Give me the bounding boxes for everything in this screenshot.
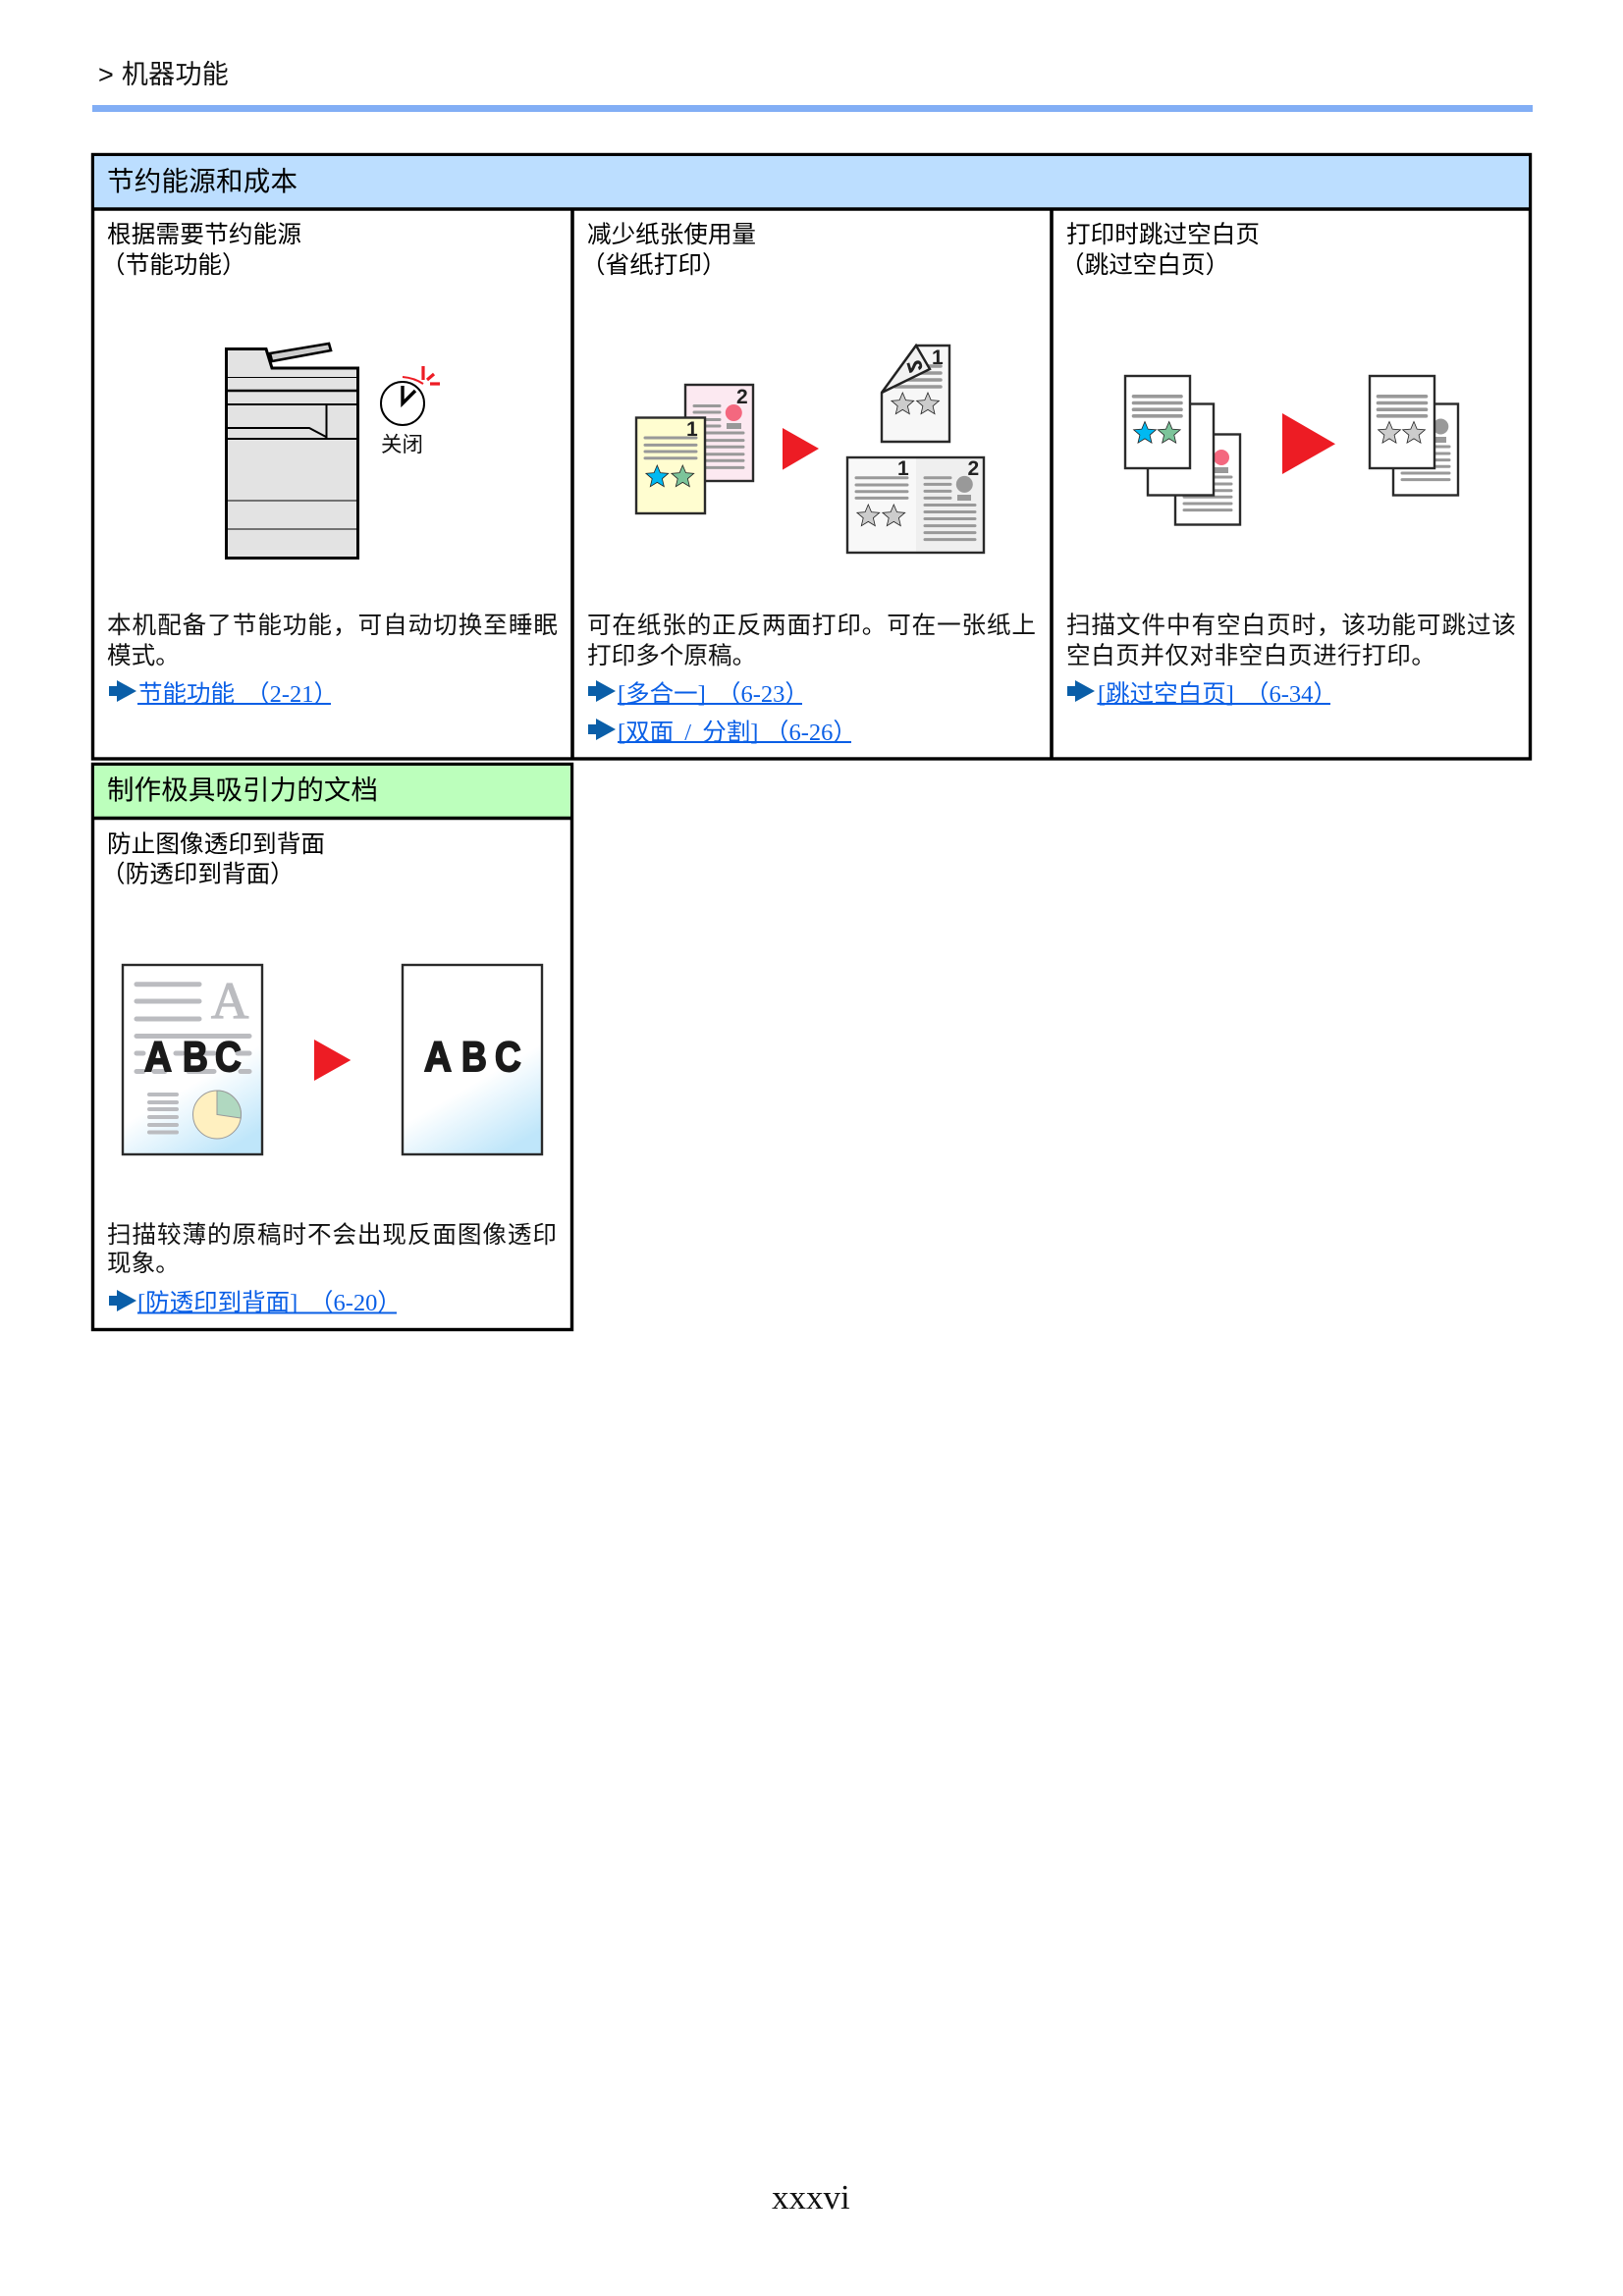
description line 2: 现象。 — [107, 1250, 180, 1277]
illustration: duplex page: 2 — [902, 358, 926, 375]
illustration: clean result: C — [495, 1034, 521, 1081]
illustration: 2-in-1 page: 1 — [897, 457, 909, 480]
section header band — [94, 766, 570, 817]
section header band — [94, 156, 1529, 208]
link arrow — [109, 680, 136, 702]
description line 2: 空白页并仅对非空白页进行打印。 — [1066, 642, 1435, 669]
panel heading: 根据需要节约能源 — [107, 221, 301, 248]
illustration: clean result: B — [461, 1034, 487, 1081]
description line 2: 模式。 — [107, 642, 180, 669]
clock label: 关闭 — [381, 433, 423, 456]
illustration: clean result — [403, 965, 542, 1154]
illustration: clean result: A — [424, 1033, 452, 1080]
illustration: 2-in-1 page: 2 — [968, 457, 979, 480]
description: 本机配备了节能功能，可自动切换至睡眠 — [107, 612, 558, 639]
illustration: two pages — [636, 385, 753, 513]
description: 可在纸张的正反两面打印。可在一张纸上 — [587, 612, 1036, 639]
link: [防透印到背面] — [137, 1290, 298, 1316]
panel subheading: （省纸打印） — [581, 251, 727, 279]
illustration: show-through original: B — [183, 1034, 208, 1081]
panel: paper saving — [581, 221, 1036, 746]
panel subheading: （跳过空白页） — [1060, 251, 1229, 279]
description: 扫描文件中有空白页时，该功能可跳过该 — [1066, 612, 1516, 639]
illustration: duplex page: 1 — [932, 347, 944, 369]
link arrow 2 — [588, 719, 616, 740]
section: attractive documents — [92, 764, 572, 1329]
section background and heading band — [92, 155, 1530, 759]
illustration: duplex page — [882, 346, 949, 442]
illustration: show-through original: A — [211, 973, 248, 1030]
description: 扫描较薄的原稿时不会出现反面图像透印 — [107, 1221, 557, 1249]
link 2: （6-26） — [765, 719, 857, 746]
header rule — [92, 105, 1533, 112]
illustration: two pages — [1370, 376, 1458, 495]
link: 节能功能 （2-21） — [138, 680, 338, 708]
arrow: red — [1282, 413, 1335, 474]
link arrow — [1067, 680, 1095, 702]
section title: 制作极具吸引力的文档 — [107, 774, 378, 805]
link: [多合一] （6-23） — [618, 680, 809, 708]
panel: energy saving — [101, 221, 558, 708]
link: [跳过空白页] （6-34） — [1098, 680, 1337, 708]
link arrow — [109, 1290, 136, 1311]
arrow: red — [314, 1040, 351, 1081]
page number: xxxvi — [772, 2178, 850, 2216]
link — [137, 1289, 402, 1316]
section title: 节约能源和成本 — [107, 166, 298, 196]
link arrow — [588, 680, 616, 702]
panel subheading: （节能功能） — [101, 251, 246, 279]
illustration: three pages — [1125, 376, 1240, 524]
illustration: show-through original: A — [144, 1033, 172, 1080]
icon: timer clock — [381, 366, 440, 425]
illustration: show-through original — [123, 965, 262, 1154]
illustration: show-through original: C — [215, 1034, 242, 1081]
link 2 — [618, 719, 857, 746]
panel heading: 防止图像透印到背面 — [107, 830, 325, 858]
arrow: red — [783, 428, 819, 470]
section frame — [92, 764, 571, 1329]
icon: multifunction printer — [226, 344, 357, 558]
frame lines — [92, 209, 1531, 759]
link: （6-20） — [309, 1289, 402, 1316]
panel subheading: （防透印到背面） — [101, 860, 295, 887]
panel heading: 打印时跳过空白页 — [1066, 221, 1260, 248]
panel heading: 减少纸张使用量 — [587, 221, 756, 248]
illustration: two pages: 1 — [686, 418, 698, 441]
page header breadcrumb: > 机器功能 — [98, 60, 229, 89]
header divider — [92, 817, 572, 820]
link 2: [双面 / 分割] — [618, 720, 758, 746]
illustration: 2-in-1 page — [847, 457, 984, 553]
section: save energy and cost — [92, 155, 1531, 759]
panel: skip blank page — [1060, 221, 1516, 708]
description line 2: 打印多个原稿。 — [587, 642, 756, 669]
illustration: two pages: 2 — [736, 386, 748, 408]
